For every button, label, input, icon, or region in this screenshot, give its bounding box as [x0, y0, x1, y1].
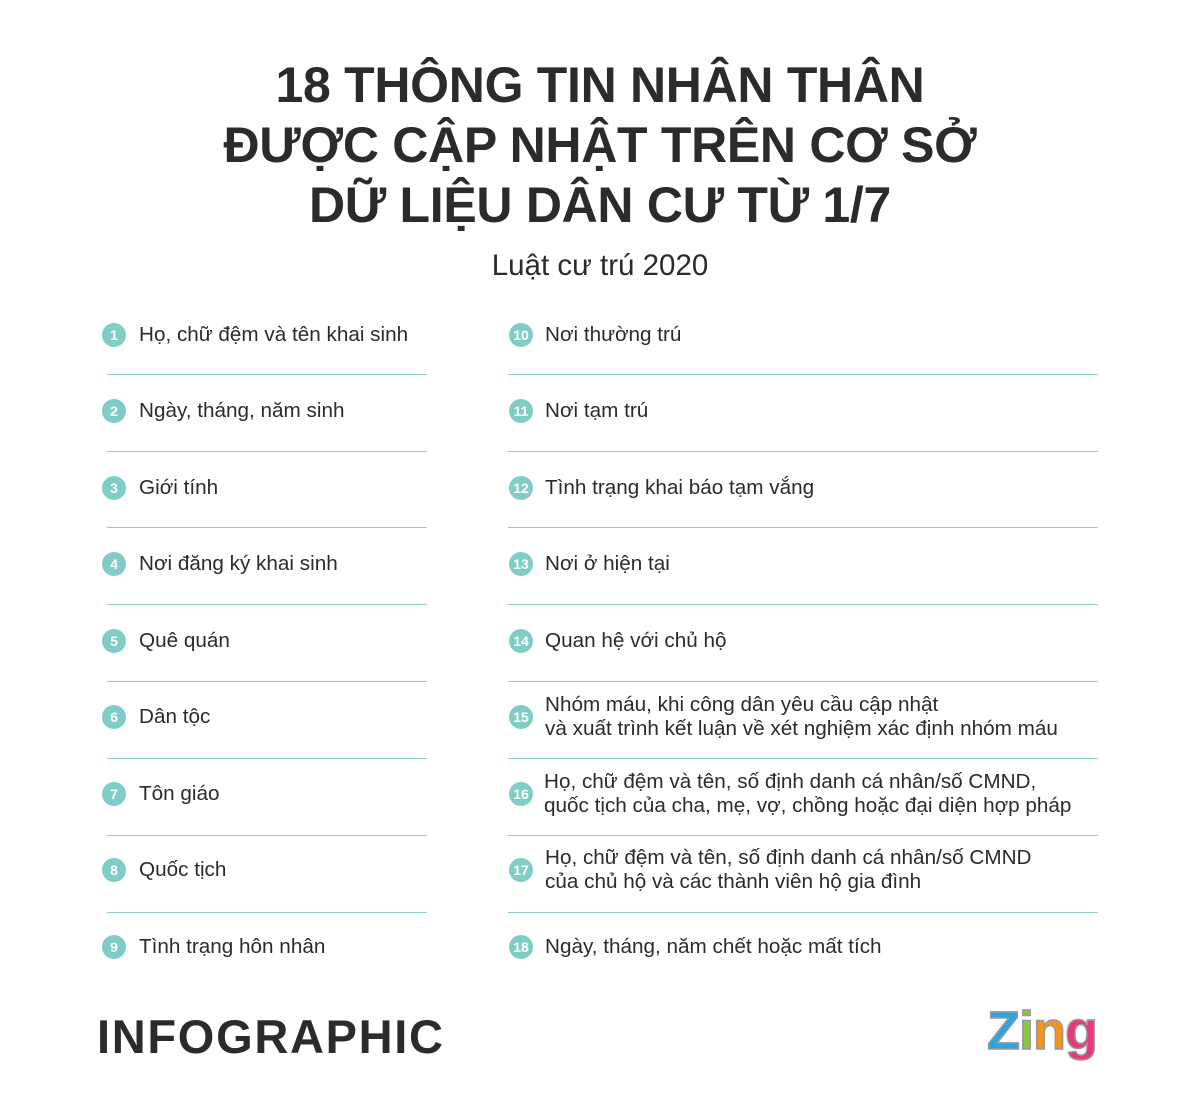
left column list: Họ, chữ đệm và tên khai sinh: [139, 323, 408, 346]
left column list: Tình trạng hôn nhân: [139, 935, 325, 958]
left column list: 9: [110, 939, 118, 955]
right column list: 10: [513, 327, 529, 343]
right column list: Nơi tạm trú: [545, 399, 648, 422]
subtitle: Luật cư trú 2020: [492, 249, 708, 282]
logo: Zing: Zing: [987, 1001, 1097, 1061]
left column list: 6: [110, 709, 118, 725]
right column list: 16: [513, 786, 529, 802]
right column list: 15: [513, 709, 529, 725]
title: 18 THÔNG TIN NHÂN THÂN: [276, 57, 924, 113]
right column list: 13: [513, 556, 529, 572]
right column list: quốc tịch của cha, mẹ, vợ, chồng hoặc đại diện hợp pháp: [544, 794, 1071, 817]
right column list: Nhóm máu, khi công dân yêu cầu cập nhật: [545, 693, 938, 716]
right column list: Nơi thường trú: [545, 323, 681, 346]
right column list: 17: [513, 862, 529, 878]
left column list: [102, 323, 427, 959]
right column list: Quan hệ với chủ hộ: [545, 629, 726, 652]
left column list: Tôn giáo: [139, 782, 220, 805]
right column list: Họ, chữ đệm và tên, số định danh cá nhân/số CMND,: [544, 770, 1036, 793]
left column list: Giới tính: [139, 476, 218, 499]
right column list: Tình trạng khai báo tạm vắng: [545, 476, 814, 499]
right column list: và xuất trình kết luận về xét nghiệm xác định nhóm máu: [545, 717, 1058, 740]
right column list: 11: [514, 403, 528, 419]
title: ĐƯỢC CẬP NHẬT TRÊN CƠ SỞ: [223, 117, 976, 173]
right column list: 18: [513, 939, 529, 955]
logo: INFOGRAPHIC: INFOGRAPHIC: [97, 1010, 445, 1063]
left column list: 3: [110, 480, 118, 496]
right column list: 12: [513, 480, 529, 496]
title: DỮ LIỆU DÂN CƯ TỪ 1/7: [309, 177, 891, 233]
right column list: Nơi ở hiện tại: [545, 552, 670, 575]
left column list: 5: [110, 633, 118, 649]
right column list: Ngày, tháng, năm chết hoặc mất tích: [545, 935, 882, 958]
left column list: Dân tộc: [139, 705, 210, 728]
right column list: [508, 323, 1098, 959]
left column list: 7: [110, 786, 118, 802]
right column list: Họ, chữ đệm và tên, số định danh cá nhân/số CMND: [545, 846, 1031, 869]
right column list: 14: [513, 633, 529, 649]
left column list: Quốc tịch: [139, 858, 226, 881]
left column list: Nơi đăng ký khai sinh: [139, 552, 338, 575]
right column list: của chủ hộ và các thành viên hộ gia đình: [545, 870, 921, 893]
left column list: Quê quán: [139, 629, 230, 652]
left column list: 4: [110, 556, 118, 572]
left column list: Ngày, tháng, năm sinh: [139, 399, 344, 422]
left column list: 2: [110, 403, 118, 419]
left column list: 1: [110, 327, 118, 343]
left column list: 8: [110, 862, 118, 878]
title: [223, 56, 977, 233]
